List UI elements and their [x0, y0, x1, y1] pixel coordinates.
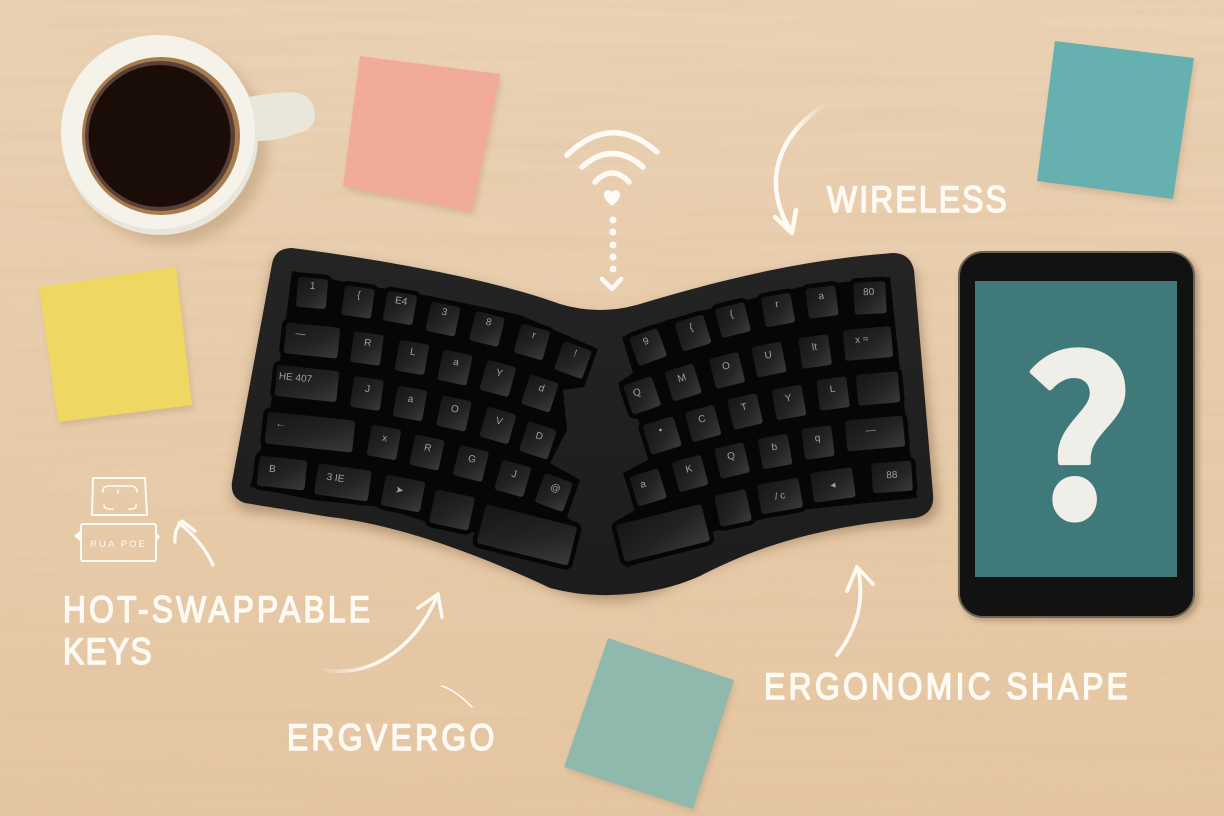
left key cluster: 8: [485, 317, 493, 329]
sticky note: teal: [1037, 41, 1196, 203]
right key cluster: U: [764, 349, 773, 362]
right key cluster: Y: [784, 393, 793, 405]
right key cluster: T: [740, 402, 748, 414]
right key cluster: C: [697, 413, 707, 426]
right key cluster: M: [676, 372, 688, 385]
label: hot-swappable keys: HOT-SWAPPABLE: [63, 590, 370, 631]
left key cluster: J: [510, 469, 518, 481]
tablet screen: [975, 281, 1177, 577]
sticky note: pink: [343, 56, 502, 216]
right key cluster: 9: [642, 336, 651, 348]
sticky note: green: [564, 638, 736, 813]
tablet: [959, 252, 1199, 621]
right key cluster: a: [818, 291, 825, 302]
right key cluster: O: [721, 360, 731, 373]
mug handle: [248, 92, 315, 141]
left key cluster: !: [572, 348, 578, 360]
right key cluster: •: [657, 425, 664, 436]
squiggle mark: [442, 686, 472, 707]
left key cluster: a: [407, 394, 415, 406]
right key cluster: 88: [886, 470, 898, 481]
right key cluster: q: [814, 433, 821, 444]
left key cluster: {: [356, 290, 362, 301]
right key cluster: L: [829, 384, 836, 395]
left key cluster: 3 IE: [326, 472, 345, 485]
icon: hot-swappable keycap: RUA POE: [90, 539, 145, 550]
left key cluster: d: [537, 383, 546, 395]
label: hot-swappable keys: [63, 590, 370, 673]
left key cluster: R: [423, 442, 432, 455]
right key cluster: ◂: [830, 480, 836, 491]
right key well: [613, 277, 917, 568]
right key cluster: —: [865, 425, 876, 437]
icon: wifi signal with dotted arrow: [567, 133, 657, 289]
question mark: ?: [1022, 267, 1134, 580]
right key cluster: x ≈: [855, 334, 869, 346]
left key cluster: [257, 277, 592, 566]
left key well: [250, 271, 598, 568]
keyboard: [232, 248, 938, 600]
keyboard shadow: [233, 254, 938, 600]
arrow: wireless: [775, 103, 827, 233]
keyboard body: [232, 248, 933, 595]
right key cluster: {: [688, 322, 695, 333]
left key cluster: a: [452, 357, 460, 369]
left key cluster: J: [364, 384, 371, 395]
label: ergonomic shape: ERGONOMIC SHAPE: [764, 667, 1128, 708]
sticky note: yellow: [39, 267, 194, 426]
left key cluster: D: [534, 430, 544, 443]
right key cluster: Q: [726, 450, 736, 463]
right key cluster: [616, 281, 913, 562]
label: hot-swappable keys: KEYS: [63, 632, 152, 673]
left key cluster: @: [549, 482, 562, 496]
right key cluster: 80: [863, 287, 875, 298]
left key cluster: G: [467, 453, 477, 466]
arrow: hot-swappable: [175, 521, 213, 565]
left key cluster: r: [531, 330, 538, 342]
left key cluster: E4: [394, 295, 409, 308]
right key cluster: K: [684, 463, 694, 476]
left key cluster: R: [363, 338, 372, 349]
left key cluster: Y: [495, 367, 504, 380]
label: ergvergo: ERGVERGO: [287, 718, 494, 759]
left key cluster: B: [268, 464, 277, 475]
left key cluster: —: [295, 328, 306, 340]
left key cluster: ←: [275, 418, 286, 430]
arrow: ergonomic shape: [837, 567, 873, 655]
right key cluster: lt: [811, 342, 818, 353]
left key cluster: O: [450, 403, 460, 416]
coffee: [88, 65, 230, 207]
left key cluster: V: [494, 415, 504, 428]
right key cluster: b: [771, 442, 779, 453]
left key cluster: x: [381, 433, 388, 444]
right key cluster: r: [774, 299, 780, 310]
right key cluster: a: [639, 479, 648, 491]
left key cluster: HE 407: [278, 371, 313, 386]
left key cluster: 3: [440, 307, 449, 319]
arrow: ergvergo: [317, 594, 442, 671]
left key cluster: L: [409, 347, 417, 359]
label: wireless: WIRELESS: [827, 180, 1007, 221]
icon: hot-swappable keycap: [74, 478, 160, 561]
coffee mug: [61, 35, 315, 244]
right key cluster: Q: [632, 386, 643, 399]
right key cluster: {: [729, 309, 735, 320]
left key cluster: ➤: [394, 485, 405, 497]
left key cluster: 1: [309, 281, 316, 292]
right key cluster: / c: [774, 490, 786, 503]
